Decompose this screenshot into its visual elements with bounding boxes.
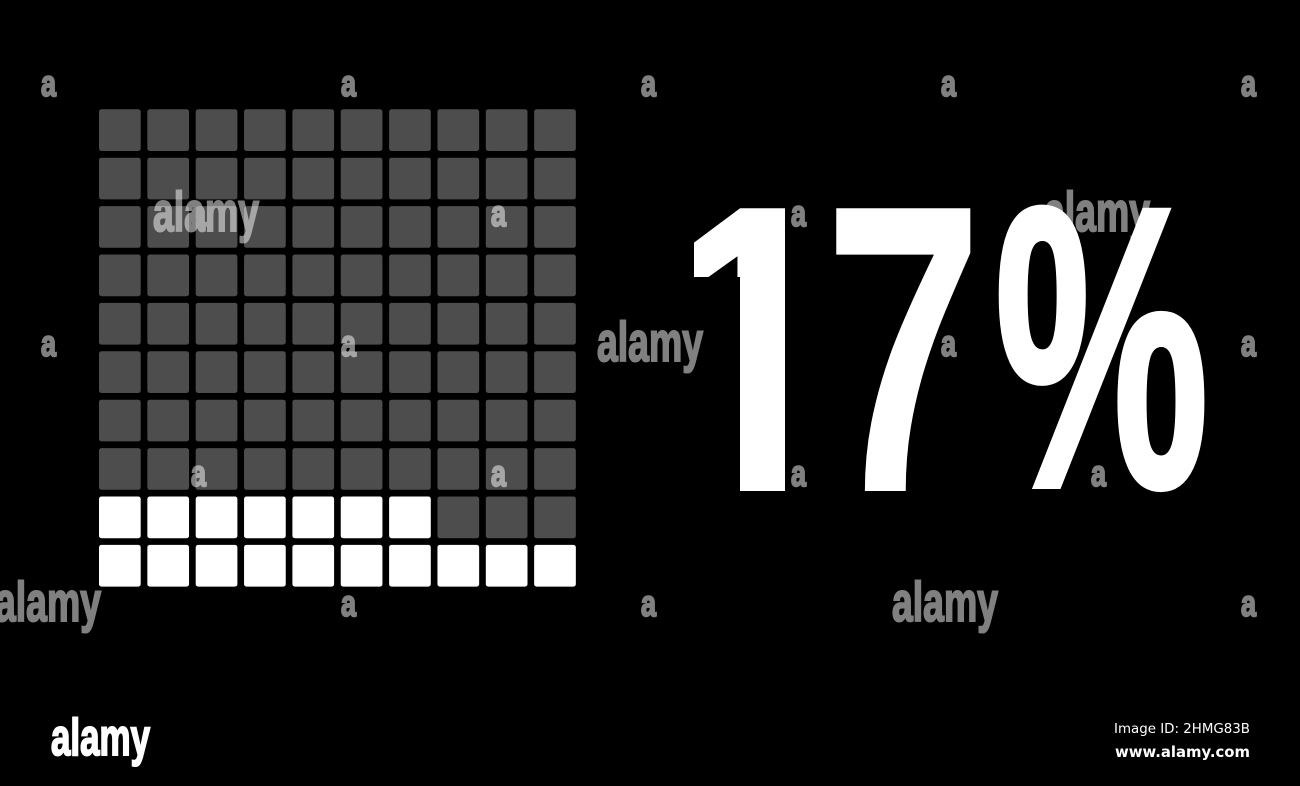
alamy logo: alamy: [51, 709, 150, 767]
watermark small letters: a: [41, 323, 56, 364]
percent sign: %: [994, 124, 1209, 571]
row 4: unfilled squares: [99, 254, 576, 296]
watermark layer: [0, 63, 1256, 633]
watermark small letters: a: [341, 323, 356, 364]
watermark small letters: a: [941, 323, 956, 364]
watermark small letters: a: [1241, 583, 1256, 624]
watermark small letters: a: [491, 453, 506, 494]
watermark small letters: a: [191, 453, 206, 494]
row 7: unfilled squares: [99, 400, 576, 441]
row 1: unfilled squares: [99, 109, 576, 151]
watermark small letters: a: [1241, 323, 1256, 364]
watermark small letters: a: [1241, 63, 1256, 104]
watermark words: alamy: [1044, 180, 1150, 243]
row 8: unfilled squares: [99, 448, 576, 490]
watermark words: alamy: [597, 310, 703, 373]
watermark small letters: a: [641, 63, 656, 104]
image id: Image ID: 2HMG83B: [1114, 721, 1250, 737]
row 5: unfilled squares: [99, 303, 576, 345]
watermark small letters: a: [791, 193, 806, 234]
watermark small letters: a: [941, 63, 956, 104]
row 6: unfilled squares: [99, 351, 576, 393]
watermark words: [0, 180, 1150, 633]
row 2: unfilled squares: [99, 158, 576, 199]
row 10: ten filled squares: [99, 545, 576, 587]
watermark small letters: a: [341, 583, 356, 624]
waffle chart: 17 of 100 squares filled: [99, 109, 576, 587]
digit 1: 1: [654, 119, 853, 578]
watermark small letters: a: [491, 193, 506, 234]
website: www.alamy.com: [1115, 743, 1250, 761]
watermark words: alamy: [892, 570, 998, 633]
big percentage value: [694, 204, 1204, 492]
watermark small letters: a: [641, 583, 656, 624]
watermark small letters: a: [191, 193, 206, 234]
watermark small letters: a: [41, 63, 56, 104]
row 9: seven filled squares, three unfilled: [99, 496, 576, 538]
watermark small letters: a: [341, 63, 356, 104]
row 3: unfilled squares: [99, 206, 576, 248]
watermark small letters: a: [1091, 453, 1106, 494]
watermark small letters: a: [791, 453, 806, 494]
watermark small letters: [41, 63, 1256, 624]
watermark words: alamy: [153, 180, 259, 243]
digit 7: 7: [824, 119, 983, 578]
